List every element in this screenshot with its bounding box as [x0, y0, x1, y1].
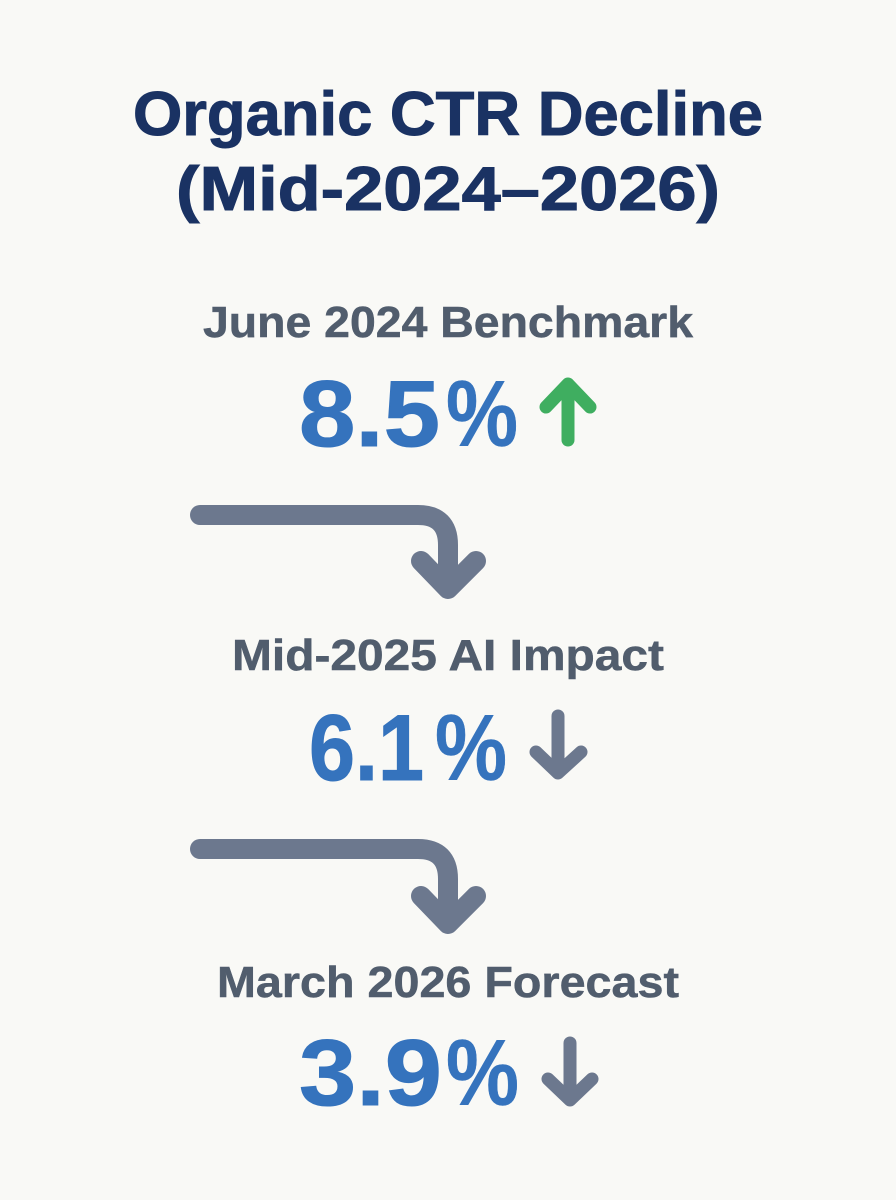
value: 8.5%: % [446, 361, 518, 466]
title: Organic CTR Decline [133, 80, 763, 149]
value: 3.9% [299, 1020, 519, 1125]
value: 6.1%: 6.1 [309, 695, 424, 800]
icon: grey down arrow [548, 1043, 592, 1100]
arrow: first connector [200, 515, 476, 589]
value: 8.5%: 8.5 [299, 361, 440, 466]
icon: green up arrow [546, 384, 590, 440]
value: 3.9%: % [446, 1020, 519, 1125]
value: 6.1%: % [435, 695, 507, 800]
label: Mid-2025 AI Impact: Mid-2025 AI Impact [232, 631, 664, 680]
value: 6.1% [309, 695, 507, 800]
label: June 2024 Benchmark: June 2024 Benchmark [203, 298, 694, 347]
arrow: second connector [200, 849, 476, 924]
value: 8.5% [299, 361, 518, 466]
icon: grey down arrow [536, 716, 581, 773]
title: (Mid-2024–2026) [176, 155, 720, 224]
title [133, 80, 763, 224]
label: March 2026 Forecast: March 2026 Forecast [217, 958, 679, 1007]
value: 3.9%: 3.9 [299, 1020, 442, 1125]
